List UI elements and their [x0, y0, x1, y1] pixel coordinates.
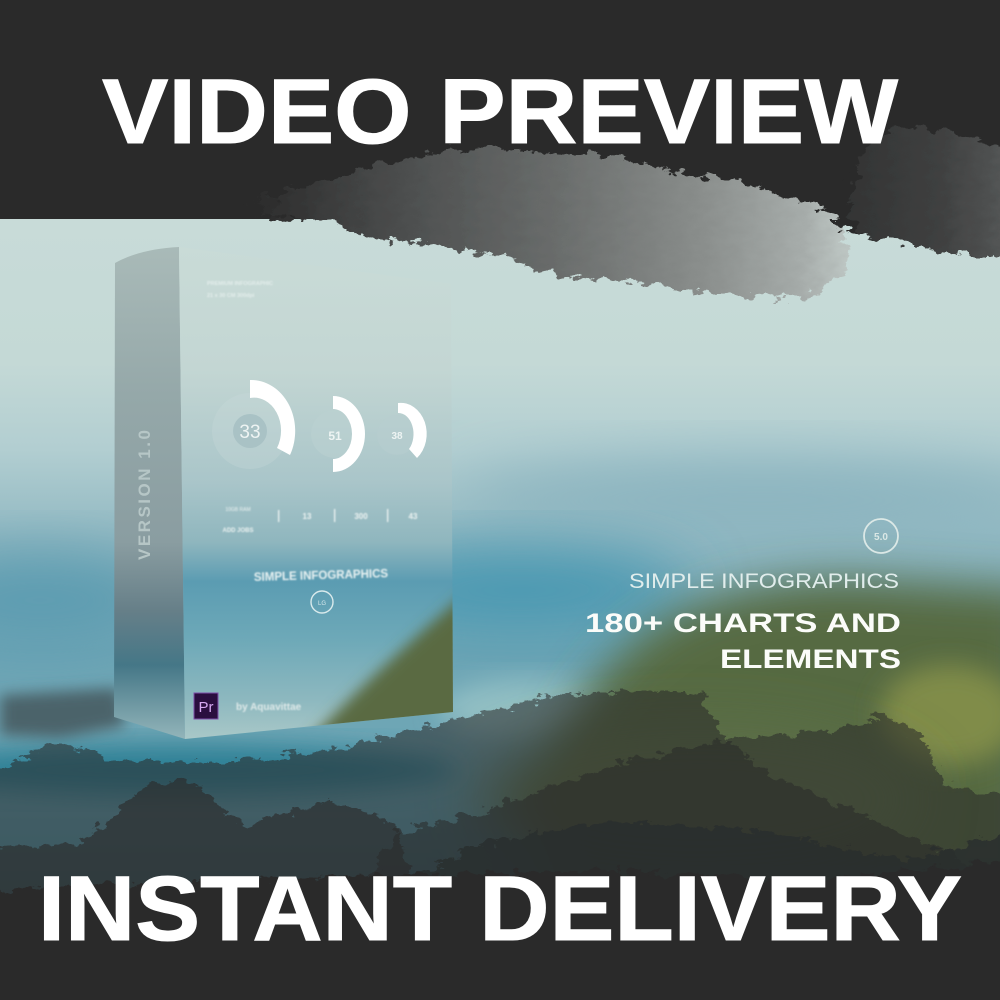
- icon: premiere pro: Pr: [198, 699, 214, 716]
- donut chart 51: 51: [328, 429, 342, 443]
- box front landscape: [309, 593, 453, 726]
- box side panel: [114, 247, 185, 739]
- green hill: [545, 579, 1000, 900]
- box statistics row: 10GB RAM: [225, 507, 251, 513]
- box statistics row: 43: [409, 512, 418, 521]
- box statistics row: 300: [354, 512, 368, 521]
- title: video preview: VIDEO PREVIEW: [102, 61, 898, 163]
- box statistics row: ADD JOBS: [222, 528, 254, 534]
- top brush right piece: [835, 120, 1000, 256]
- box spine label: VERSION 1.0: [135, 430, 154, 560]
- box statistics row: 13: [303, 512, 312, 521]
- bottom dark brush layers: [0, 715, 1000, 1000]
- donut chart 33: 33: [239, 422, 261, 443]
- top brush stroke: [240, 148, 850, 298]
- promo headline: [585, 608, 901, 674]
- promo headline: ELEMENTS: [720, 644, 901, 674]
- product box: [114, 247, 470, 750]
- icon: premiere pro: [194, 693, 218, 719]
- donut chart 38: 38: [391, 431, 403, 442]
- box statistics row: [222, 507, 418, 534]
- donut chart 33: [212, 380, 295, 469]
- box product title: SIMPLE INFOGRAPHICS: [254, 568, 389, 584]
- promo headline: 180+ CHARTS AND: [585, 608, 901, 638]
- box header text: [207, 281, 273, 299]
- box shadow: [0, 688, 125, 738]
- box version badge: [311, 591, 333, 613]
- promo badge: [864, 519, 898, 553]
- box author credit: by Aquavittae: [236, 702, 302, 713]
- bottom mid brush stroke: [0, 692, 1000, 1000]
- promo subtitle: SIMPLE INFOGRAPHICS: [629, 570, 899, 593]
- box header text: PREMIUM INFOGRAPHIC: [207, 281, 273, 287]
- promo badge: 5.0: [874, 532, 888, 543]
- floor tone: [0, 744, 460, 796]
- donut chart 51: [311, 396, 365, 472]
- box front panel: [179, 247, 453, 739]
- box version badge: LG: [318, 601, 326, 607]
- bottom dark band: [0, 860, 1000, 1000]
- photo background with blurred landscape: [0, 219, 1000, 939]
- title: instant delivery: INSTANT DELIVERY: [38, 858, 962, 960]
- box header text: 21 x 30 CM 300dpi: [207, 293, 255, 299]
- donut chart 38: [377, 403, 427, 458]
